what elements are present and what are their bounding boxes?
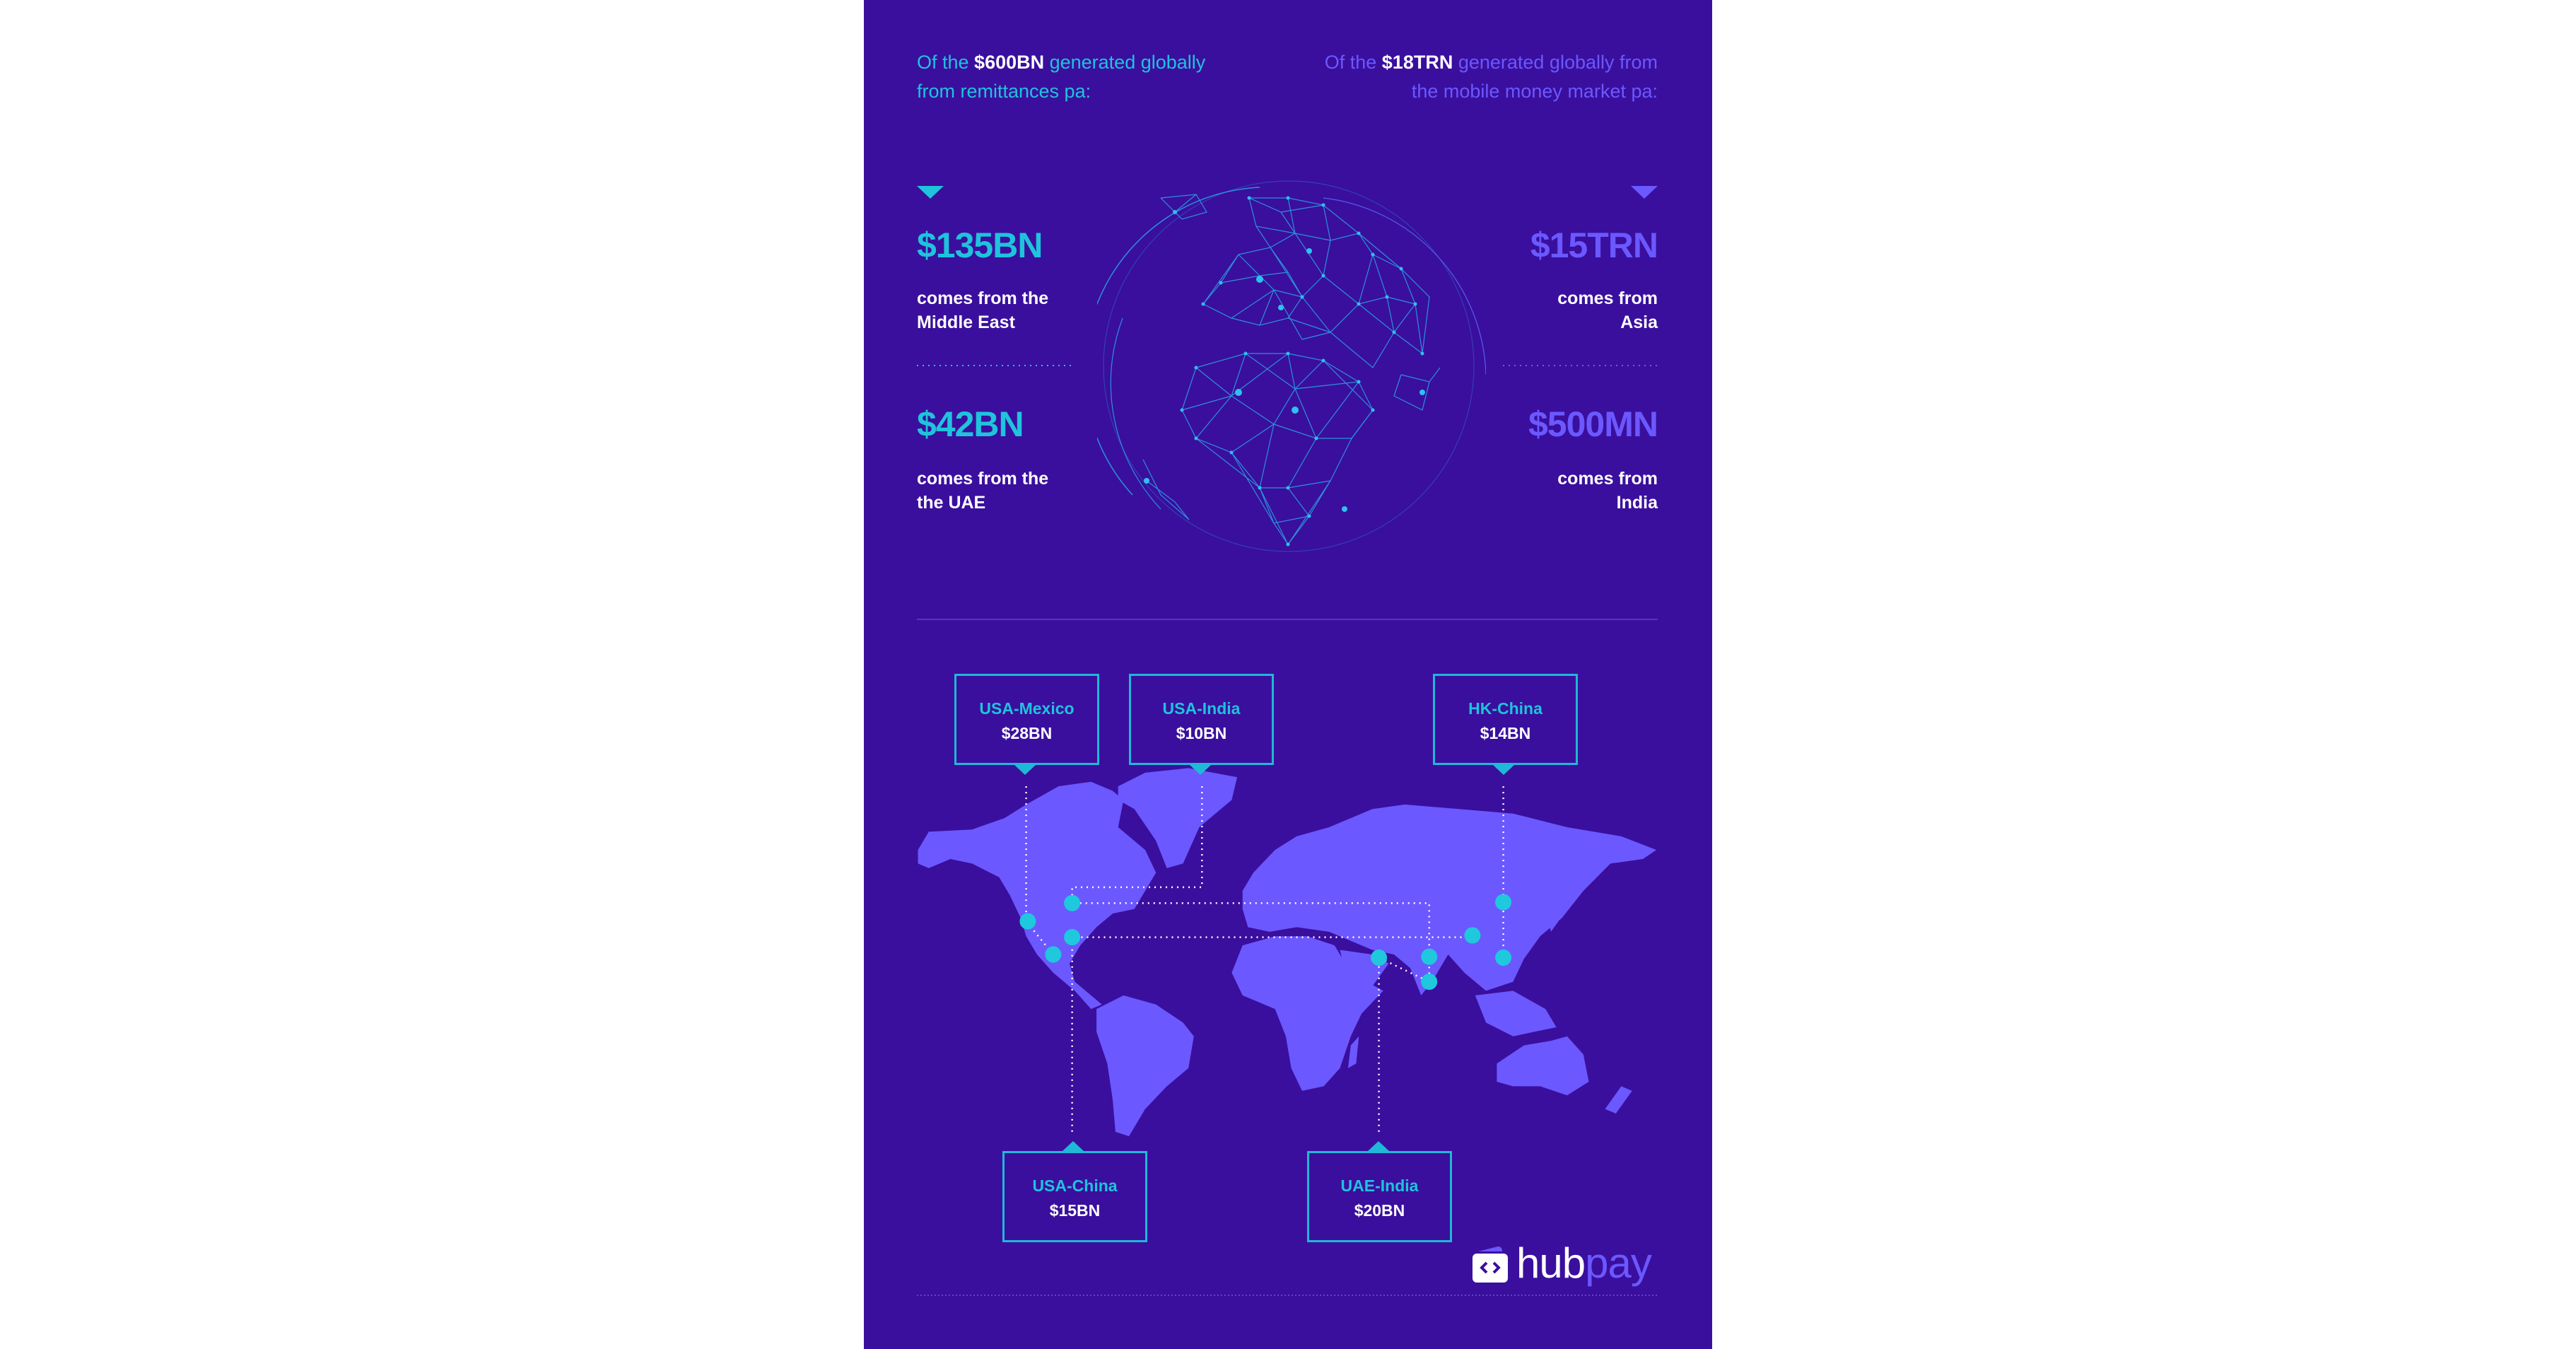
text: india: [1557, 469, 1658, 513]
text: india: India: [1617, 493, 1658, 513]
icon: left triangle: [917, 186, 944, 199]
callout: USA-India: USA-India: [1163, 699, 1240, 718]
text: hubpay: hubpay: [1516, 1239, 1651, 1287]
stat: 500MN: $500MN: [1528, 404, 1658, 444]
callout: UAE-India: [1307, 1151, 1452, 1242]
text: remittances intro: from remittances pa:: [917, 81, 1091, 102]
callout: USA-Mexico: $28BN: [1002, 724, 1052, 742]
callout: UAE-India: $20BN: [1354, 1201, 1405, 1220]
callout: HK-China: [1433, 674, 1578, 765]
icon: wallet: [1473, 1246, 1508, 1283]
stat: 42BN: $42BN: [917, 404, 1024, 444]
icon: right triangle: [1631, 186, 1658, 199]
globe network: [1097, 180, 1486, 552]
text: india: comes from: [1557, 469, 1658, 489]
text: uae: the UAE: [917, 493, 985, 513]
text: uae: comes from the: [917, 469, 1048, 489]
callout: HK-China: $14BN: [1480, 724, 1530, 742]
text: middle east: comes from the: [917, 288, 1048, 308]
text: asia: Asia: [1620, 313, 1658, 332]
callout: USA-China: $15BN: [1050, 1201, 1100, 1220]
callout: USA-India: $10BN: [1176, 724, 1226, 742]
panel: infographic: [864, 0, 1712, 1349]
text: asia: [1557, 288, 1658, 332]
callout: USA-China: USA-China: [1032, 1176, 1118, 1195]
callout: USA-India: [1129, 674, 1274, 765]
callout: USA-Mexico: USA-Mexico: [979, 699, 1075, 718]
callout: HK-China: HK-China: [1468, 699, 1542, 718]
text: middle east: Middle East: [917, 313, 1015, 332]
logo: hubpay: [1473, 1239, 1652, 1287]
stat: 135BN: $135BN: [917, 226, 1042, 265]
callout: USA-Mexico: [954, 674, 1099, 765]
text: uae: [917, 469, 1048, 513]
text: mobile money intro: the mobile money market pa:: [1412, 81, 1658, 102]
text: mobile money intro: [1325, 52, 1658, 102]
callout: UAE-India: UAE-India: [1341, 1176, 1418, 1195]
text: remittances intro: Of the $600BN generated globally: [917, 52, 1205, 73]
text: middle east: [917, 288, 1048, 332]
text: asia: comes from: [1557, 288, 1658, 308]
text: mobile money intro: Of the $18TRN generated globally from: [1325, 52, 1658, 73]
text: remittances intro: [917, 52, 1206, 102]
stat: 15TRN: $15TRN: [1530, 226, 1658, 265]
world map: [918, 768, 1656, 1137]
callout: USA-China: [1002, 1151, 1147, 1242]
